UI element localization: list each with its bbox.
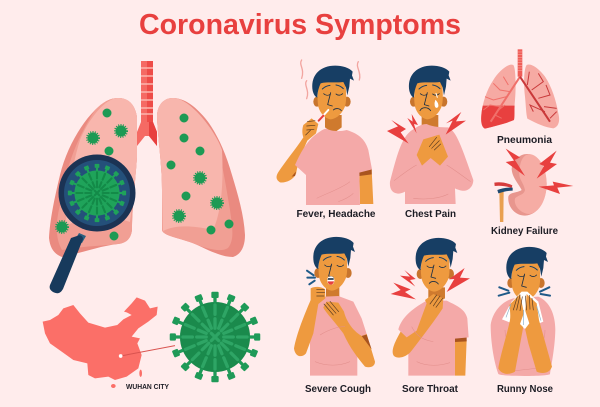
small virus particles (56, 109, 233, 240)
person: severe cough (294, 237, 375, 376)
left lung (49, 98, 137, 257)
kidney icon (494, 149, 573, 222)
person: runny nose (491, 247, 555, 376)
right lung (157, 98, 245, 257)
label: pneumonia: Pneumonia (497, 135, 552, 146)
person: sore throat (391, 238, 470, 376)
label: sore throat: Sore Throat (402, 384, 459, 395)
label: chest pain: Chest Pain (405, 209, 456, 220)
label: fever, headache: Fever, Headache (296, 209, 376, 220)
Wuhan City label: WUHAN CITY (126, 384, 169, 391)
person: chest pain (387, 66, 473, 204)
label: kidney failure: Kidney Failure (491, 226, 558, 237)
large lungs illustration (49, 61, 245, 257)
virus under the lens (68, 164, 126, 222)
pneumonia lungs icon (481, 49, 559, 129)
title: Coronavirus Symptoms (139, 9, 461, 41)
label: runny nose: Runny Nose (497, 384, 553, 395)
trachea (137, 61, 157, 146)
person: fever and headache (277, 60, 373, 205)
label: severe cough: Severe Cough (305, 384, 371, 395)
map of China (43, 297, 175, 388)
large coronavirus (170, 292, 260, 382)
magnifying glass (50, 154, 136, 293)
